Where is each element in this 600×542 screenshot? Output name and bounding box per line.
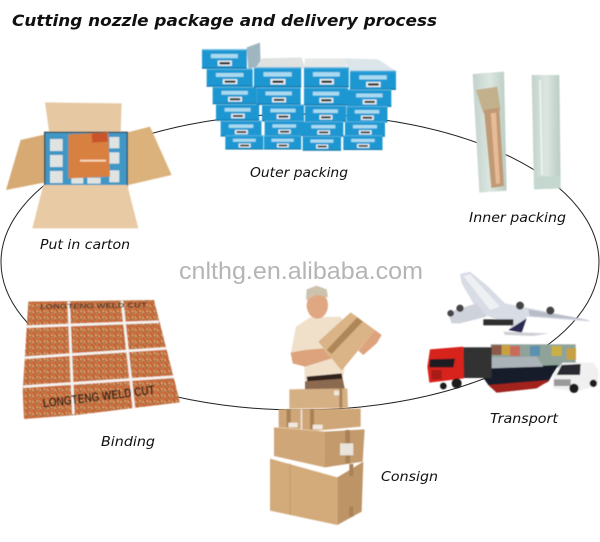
container stack [491, 344, 576, 368]
delivery man head [307, 292, 328, 319]
photo: bound package with straps: LONGTENG WELD CUT [42, 383, 156, 411]
photo: open carton [6, 102, 172, 228]
delivery man arms [291, 348, 332, 367]
held box [318, 312, 375, 371]
photo: outer packing blue boxes [202, 43, 397, 151]
label: put in carton: Put in carton [40, 238, 130, 253]
delivery man trousers [305, 379, 345, 390]
title: Cutting nozzle package and delivery process [12, 11, 437, 30]
airplane [447, 272, 590, 336]
label: consign: Consign [381, 470, 438, 485]
delivery man belt [307, 373, 343, 382]
photo: bound package with straps: LONGTENG WELD CUT [40, 302, 147, 311]
red truck [463, 347, 492, 378]
photo: transport plane truck ship van [427, 272, 598, 393]
photo: bound package with straps [23, 300, 180, 419]
delivery man shirt [291, 317, 351, 387]
label: inner packing: Inner packing [469, 211, 566, 226]
box stack [289, 388, 348, 409]
watermark: cnlthg.en.alibaba.com [179, 258, 423, 285]
white van [553, 363, 598, 392]
photo: delivery man with box stack [270, 286, 382, 525]
label: outer packing: Outer packing [250, 166, 348, 181]
process cycle ring [1, 114, 599, 410]
photo: inner packing plastic tubes [473, 72, 561, 193]
cargo ship [477, 365, 558, 393]
label: transport: Transport [490, 412, 559, 427]
delivery man cap [306, 286, 328, 300]
label: binding: Binding [101, 435, 155, 450]
